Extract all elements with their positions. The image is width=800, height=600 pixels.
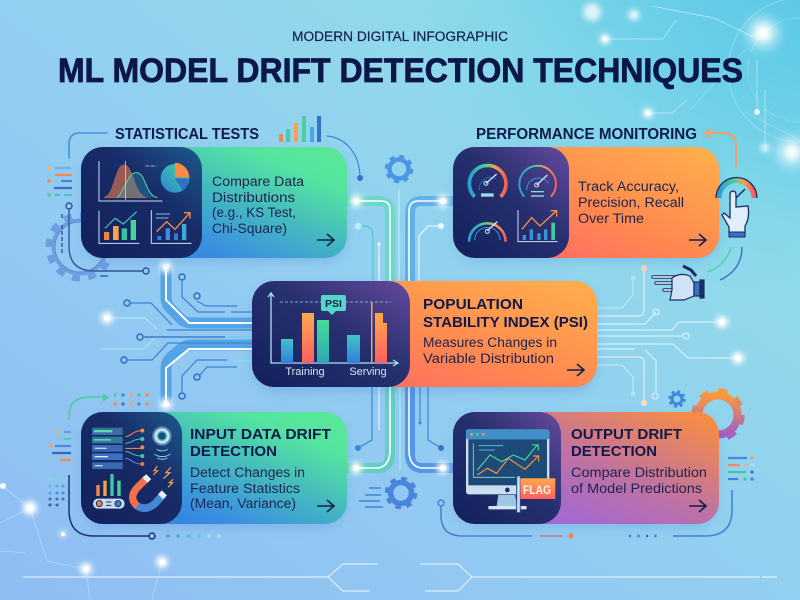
card text: population stability index: POPULATION [423,296,523,313]
card text: statistical tests: Distributions [212,190,295,205]
bracket: statistical tests [69,133,363,181]
arrow: statistical tests [317,234,334,246]
arrow: output drift detection [689,500,706,512]
card text: statistical tests: Chi-Square) [212,221,287,236]
card: input data drift detection [81,412,347,526]
card text: output drift detection: of Model Predictions [571,481,702,496]
card text: input data drift detection: Detect Changes in [190,465,305,480]
icon: robot pointing hand [653,266,704,300]
circuit: right of PSI card [597,265,744,406]
subtitle: MODERN DIGITAL INFOGRAPHIC [292,29,508,44]
bottom circuit lines [23,564,777,591]
arrow: input data drift detection [317,500,334,512]
arrow: population stability index [567,364,584,376]
card text: input data drift detection: Feature Statistics [190,481,300,496]
dot grid: left of input data [48,478,64,506]
flag label: FLAG [523,483,551,497]
card text: input data drift detection [190,426,331,511]
card: performance monitoring [453,147,719,261]
card text: statistical tests: (e.g., KS Test, [212,205,296,220]
legend dashes: left of input data [49,430,71,460]
chart: training vs serving: Training [285,366,325,378]
card text: population stability index: Variable Distribution [423,351,554,366]
gear: bottom centre with speed lines [359,478,416,508]
heading: statistical tests: STATISTICAL TESTS [115,126,259,143]
gear: top centre [386,156,412,182]
card icons: statistical charts [99,161,192,243]
card text: output drift detection: OUTPUT DRIFT [571,426,682,443]
circuit: beneath output drift [438,490,732,538]
card text: performance monitoring: Track Accuracy, [578,179,679,194]
circuit: top centre [345,190,453,282]
gear: large orange [694,390,742,440]
connector: green arrow and dots, input data [69,393,149,420]
card icon: monitor with flag [466,429,555,513]
card text: statistical tests: Compare Data [212,174,305,189]
arrow: performance monitoring [689,234,706,246]
top-right network decoration [583,0,800,164]
card text: input data drift detection: DETECTION [190,443,277,460]
card text: input data drift detection: (Mean, Variance) [190,496,296,511]
legend dashes: right of output drift [728,456,754,481]
card text: population stability index [423,296,588,366]
card text: output drift detection: Compare Distribution [571,465,707,480]
card text: output drift detection: DETECTION [571,443,657,460]
icon: gauge and robot finger [716,177,757,237]
legend dashes: left of statistical tests [47,166,72,197]
circuit: beneath input data [69,475,221,539]
card icons: data table, sensor, magnet [92,427,173,509]
arcs: beneath gauge [708,247,742,280]
card text: population stability index: STABILITY INDEX (PSI) [423,314,588,331]
gear: left outline, statistical tests [49,216,111,278]
card icons: gauges and trend [469,165,558,242]
card text: population stability index: Measures Changes in [423,335,557,350]
arrow: performance monitoring heading [705,129,736,167]
chart: training vs serving [268,293,398,378]
card text: performance monitoring [578,179,684,226]
card text: statistical tests [212,174,305,236]
circuit: left of PSI card [100,261,253,410]
card text: performance monitoring: Precision, Recall [578,195,684,210]
card: statistical tests [81,147,347,261]
mini bar icon: statistical tests [279,116,321,142]
title: ML MODEL DRIFT DETECTION TECHNIQUES [58,52,743,90]
card text: performance monitoring: Over Time [578,211,644,226]
gear: small blue [670,392,684,406]
card text: input data drift detection: INPUT DATA DRIFT [190,426,331,443]
circuit: bottom centre [345,386,453,474]
card: population stability index [252,281,597,391]
heading: performance monitoring: PERFORMANCE MONITORING [476,126,697,143]
bottom-left network decoration [0,483,168,600]
card text: output drift detection [571,426,707,496]
chart: training vs serving: Serving [349,366,387,378]
card: output drift detection [453,412,719,526]
callout: PSI: PSI [325,298,342,310]
circuit: left of statistical tests [62,203,149,276]
